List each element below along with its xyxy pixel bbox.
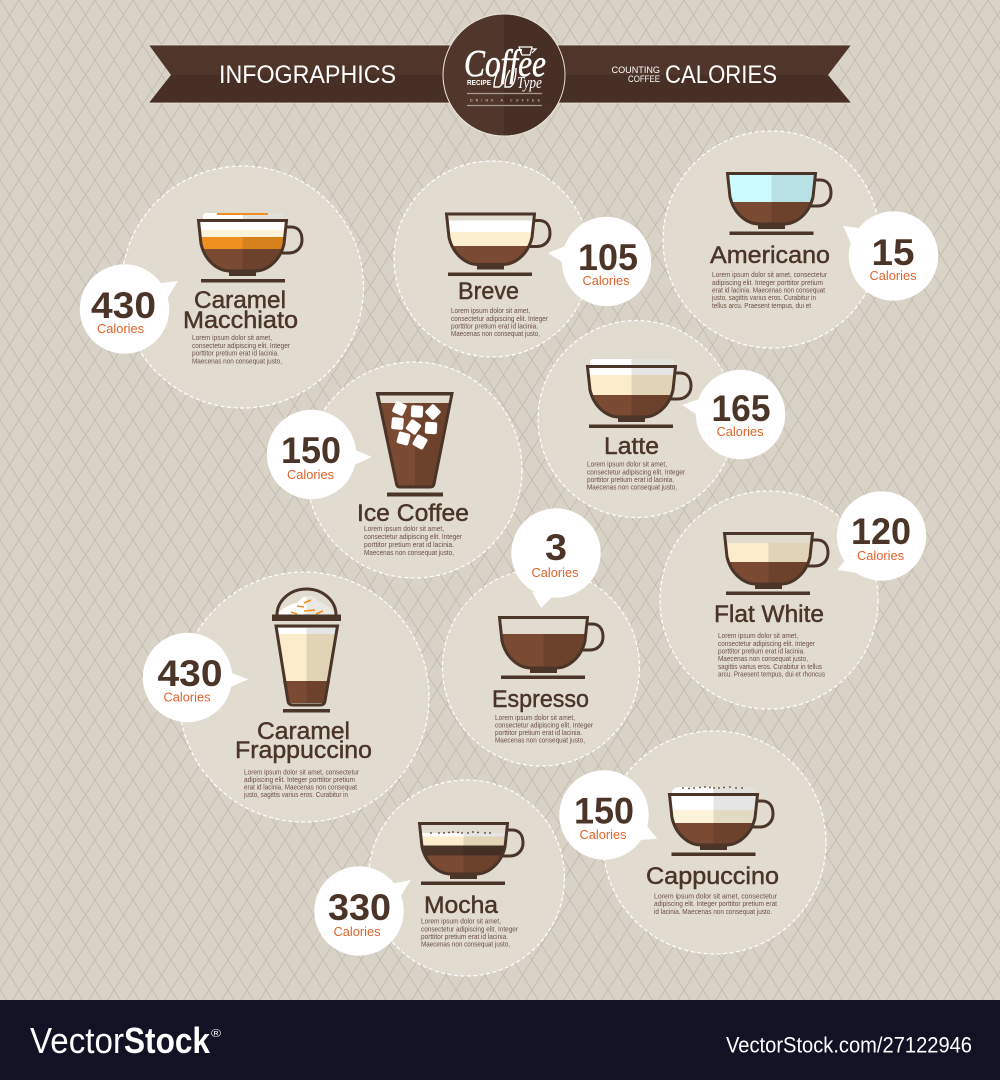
description: Maecenas non consequat justo,	[192, 356, 282, 366]
icon: americano cup	[726, 172, 831, 235]
title: Cappuccino	[646, 863, 779, 890]
panel circle	[179, 572, 429, 822]
logo word: type: Type	[517, 73, 542, 92]
callout: 3 calories: Calories	[532, 565, 579, 580]
callout: 150 calories: Calories	[287, 467, 334, 482]
callout: 120 calories: 120	[851, 511, 911, 552]
callout: 430 calories	[80, 264, 178, 354]
panel: americano	[663, 131, 938, 348]
description	[421, 916, 518, 948]
callout: 430 calories: Calories	[164, 690, 211, 704]
description: adipiscing elit. Integer porttitor pretium	[712, 278, 823, 287]
description	[495, 713, 593, 744]
icon: breve cup	[445, 214, 550, 276]
description: Lorem ipsum dolor sit amet,	[364, 524, 444, 533]
panel circle	[538, 320, 735, 518]
heading: calories: CALORIES	[665, 61, 777, 89]
description: erat id lacinia. Maecenas non consequat	[712, 286, 825, 294]
panel circle	[122, 166, 364, 408]
callout: 3 calories	[511, 508, 601, 608]
chocolate sprinkles	[682, 786, 743, 789]
callout: 330 calories	[314, 866, 411, 956]
description: arcu. Praesent tempus, dui et rhoncus	[718, 670, 825, 678]
description: porttitor pretium erat id lacinia.	[364, 540, 454, 549]
description: erat id lacinia. Maecenas non consequat	[244, 782, 357, 792]
callout: 3 calories: 3	[545, 527, 567, 568]
description: Lorem ipsum dolor sit amet,	[192, 333, 272, 342]
description: porttitor pretium erat id lacinia.	[587, 475, 674, 484]
panel: ice coffee	[267, 362, 522, 578]
title	[235, 718, 372, 764]
panel circle	[442, 569, 640, 766]
title	[183, 287, 298, 334]
description: consectetur adipiscing elit. Integer	[718, 639, 815, 648]
chocolate sprinkles	[430, 831, 491, 834]
description: tellus arcu. Praesent tempus, dui et	[712, 301, 811, 310]
logo word: recipe: RECIPE	[467, 80, 491, 87]
panel circle	[394, 161, 590, 357]
description	[364, 524, 462, 557]
description: porttitor pretium erat id lacinia.	[192, 348, 279, 358]
heading: counting coffee	[612, 65, 660, 85]
title: Latte	[604, 433, 659, 460]
icon: mocha cup	[418, 824, 523, 885]
description	[654, 892, 777, 916]
description: consectetur adipiscing elit. Integer	[495, 720, 593, 730]
callout: 430 calories: 430	[158, 653, 222, 694]
title: Ice Coffee	[357, 500, 469, 527]
callout: 150 calories: 150	[281, 430, 341, 471]
description	[587, 460, 685, 492]
description: adipiscing elit. Integer porttitor pretium erat	[654, 899, 777, 908]
description: consectetur adipiscing elit. Integer	[421, 924, 518, 934]
description: Maecenas non consequat justo,	[587, 482, 677, 492]
icon: macchiato cup	[197, 213, 302, 282]
description: porttitor pretium erat id lacinia.	[421, 932, 508, 941]
callout: 165 calories: 165	[712, 388, 770, 429]
icon: cappuccino cup	[668, 786, 773, 856]
description: porttitor pretium erat id lacinia.	[718, 646, 805, 656]
callout: 430 calories	[143, 633, 248, 722]
panel circle	[603, 731, 826, 954]
icon: flat white cup	[723, 534, 828, 595]
callout: 105 calories: Calories	[582, 273, 630, 288]
logo rules	[467, 94, 542, 106]
icon: espresso cup	[498, 618, 603, 679]
logo tagline: DRINK A COFFEE	[470, 98, 541, 102]
icon: latte cup	[586, 359, 691, 428]
title: Macchiato	[183, 307, 298, 334]
footer url: VectorStock.com/27122946	[726, 1032, 972, 1058]
callout: 150 calories: 150	[574, 790, 634, 832]
callout: 430 calories: Calories	[97, 321, 144, 336]
panel: caramel frappuccino	[143, 572, 429, 822]
description: Lorem ipsum dolor sit amet,	[587, 460, 667, 468]
title: Flat White	[714, 601, 824, 628]
logo word: Coffee: Coffee	[464, 43, 546, 85]
description: Lorem ipsum dolor sit amet,	[495, 713, 575, 722]
callout: 15 calories: Calories	[870, 268, 917, 283]
panel: espresso	[442, 508, 640, 766]
callout: 150 calories	[559, 770, 657, 860]
description: Maecenas non consequat justo,	[364, 548, 454, 557]
callout: 15 calories: 15	[872, 232, 914, 273]
description: consectetur adipiscing elit. Integer	[451, 314, 548, 323]
heading: infographics: INFOGRAPHICS	[219, 61, 396, 89]
ice cubes	[391, 401, 441, 450]
description: Lorem ipsum dolor sit amet, consectetur	[712, 270, 827, 279]
panel circle	[306, 362, 522, 578]
logo flourish	[494, 68, 516, 87]
callout: 330 calories: 330	[328, 887, 391, 928]
panel: caramel macchiato	[80, 166, 364, 408]
description: consectetur adipiscing elit. Integer	[192, 341, 290, 350]
panel circle	[660, 491, 878, 709]
heading: counting coffee: COUNTING	[612, 65, 660, 76]
header ribbon	[149, 45, 851, 103]
description: justo, sagittis varius eros. Curabitur in	[243, 790, 348, 799]
panel: latte	[538, 320, 785, 518]
title: Americano	[710, 242, 830, 269]
title: Mocha	[424, 892, 499, 919]
logo badge	[443, 14, 565, 136]
callout: 105 calories: 105	[578, 237, 638, 278]
description: id lacinia. Maecenas non consequat justo.	[654, 907, 772, 916]
description: Maecenas non consequat justo,	[718, 654, 808, 663]
footer logo	[30, 1020, 221, 1061]
title: Breve	[458, 278, 519, 305]
description: Maecenas non consequat justo,	[495, 736, 585, 744]
description: consectetur adipiscing elit. Integer	[364, 532, 462, 541]
description: Lorem ipsum dolor sit amet,	[451, 306, 530, 315]
description	[711, 270, 827, 310]
description: porttitor pretium erat id lacinia.	[495, 728, 582, 737]
description	[243, 768, 359, 799]
callout: 165 calories: Calories	[716, 424, 764, 439]
callout: 430 calories: 430	[91, 285, 156, 326]
description: porttitor pretium erat id lacinia.	[451, 322, 538, 330]
panel: cappuccino	[559, 731, 826, 954]
description: Lorem ipsum dolor sit amet,	[421, 916, 501, 926]
description	[192, 333, 290, 366]
description	[451, 306, 548, 338]
callout: 120 calories	[837, 491, 926, 581]
callout: 120 calories: Calories	[857, 548, 904, 563]
callout: 15 calories	[843, 211, 938, 301]
description: Lorem ipsum dolor sit amet, consectetur	[244, 768, 359, 776]
description: consectetur adipiscing elit. Integer	[587, 468, 685, 476]
heading: counting coffee: COFFEE	[628, 74, 660, 85]
panel circle	[368, 780, 564, 976]
callout: 150 calories: Calories	[580, 827, 627, 842]
title: Caramel	[257, 718, 350, 745]
footer logo: Vector	[30, 1020, 124, 1061]
callout: 105 calories	[548, 217, 651, 306]
description: Maecenas non consequat justo,	[421, 940, 510, 948]
description: Lorem ipsum dolor sit amet,	[718, 631, 798, 640]
description: adipiscing elit. Integer porttitor pretium	[244, 775, 355, 784]
icon: ice coffee glass	[376, 392, 453, 496]
panel: breve	[394, 161, 651, 357]
callout: 165 calories	[682, 370, 785, 459]
panel: mocha	[314, 780, 564, 976]
callout: 150 calories	[267, 410, 372, 499]
callout: 330 calories: Calories	[334, 924, 381, 939]
description: Maecenas non consequat justo,	[451, 329, 540, 338]
icon: small cup	[519, 47, 536, 55]
footer logo: Stock	[124, 1020, 211, 1061]
description: justo, sagittis varius eros. Curabitur in	[711, 293, 816, 302]
title: Frappuccino	[235, 737, 372, 764]
title: Caramel	[194, 287, 286, 314]
panel circle	[663, 131, 880, 348]
description: Lorem ipsum dolor sit amet, consectetur	[654, 892, 777, 900]
description	[718, 631, 825, 678]
icon: frappuccino cup	[272, 589, 341, 712]
description: sagittis varius eros. Curabitur in tellus	[718, 662, 822, 671]
title: Espresso	[492, 686, 589, 713]
footer band	[0, 1000, 1000, 1080]
footer logo: ®	[211, 1028, 221, 1040]
panel: flat white	[660, 491, 926, 709]
